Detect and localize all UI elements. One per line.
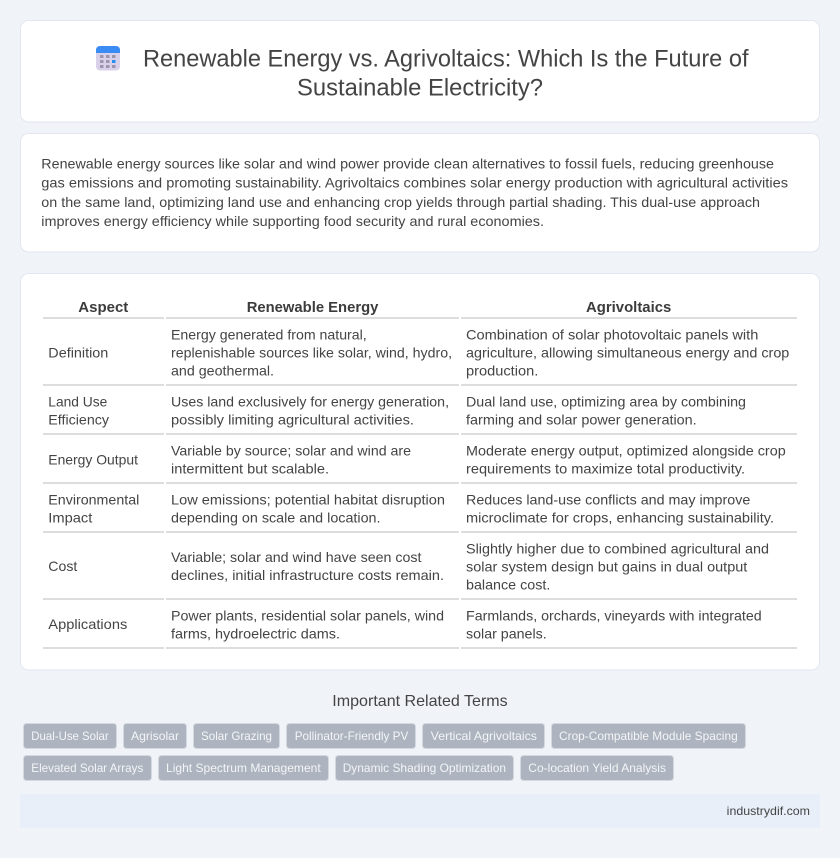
text block: introduction paragraph: on the same land, optimizing land use and enhancing crop yields through partial shading. This dual-use approach bbox=[41, 194, 760, 210]
table row: Land Use Efficiency: farming and solar power generation. bbox=[466, 412, 697, 428]
table header: Renewable Energy bbox=[247, 299, 379, 316]
table row: Definition: Combination of solar photovoltaic panels with bbox=[466, 326, 758, 342]
table row: Cost: solar system design but gains in dual output bbox=[466, 558, 747, 574]
tag: Dynamic Shading Optimization: Dynamic Shading Optimization bbox=[343, 761, 506, 775]
icon: calendar bbox=[96, 46, 120, 70]
table row: Cost: Cost bbox=[48, 558, 77, 574]
title: Renewable Energy vs. Agrivoltaics: Which Is the Future of bbox=[143, 46, 749, 73]
table row: Applications: solar panels. bbox=[466, 625, 547, 641]
text block: introduction paragraph: improves energy efficiency while supporting food security and rural economies. bbox=[41, 213, 544, 229]
tag: Dynamic Shading Optimization bbox=[336, 756, 514, 780]
text block: introduction paragraph: gas emissions and promoting sustainability. Agrivoltaics combines solar energy production with agricultural activities bbox=[41, 175, 788, 191]
table row: Environmental Impact bbox=[43, 491, 797, 533]
table row: Energy Output: Variable by source; solar and wind are bbox=[171, 442, 411, 458]
table header: Aspect bbox=[78, 299, 128, 316]
table row: Land Use Efficiency: Uses land exclusively for energy generation, bbox=[171, 394, 449, 410]
tag: Vertical Agrivoltaics bbox=[422, 724, 544, 748]
table row: Cost: declines, initial infrastructure costs remain. bbox=[171, 567, 444, 583]
footer bbox=[20, 794, 820, 828]
table row: Environmental Impact: Reduces land-use conflicts and may improve bbox=[466, 491, 751, 507]
tag list: related terms bbox=[24, 724, 746, 780]
tag: Light Spectrum Management bbox=[158, 756, 328, 780]
table row: Definition: and geothermal. bbox=[171, 362, 274, 378]
table row: Cost: balance cost. bbox=[466, 576, 550, 592]
footer: industrydif.com bbox=[727, 804, 810, 818]
tag: Agrisolar bbox=[124, 724, 186, 748]
tag: Agrisolar: Agrisolar bbox=[131, 729, 179, 743]
table row: Land Use Efficiency: Land Use bbox=[48, 394, 108, 410]
table row: Land Use Efficiency bbox=[43, 394, 797, 435]
text block: introduction paragraph bbox=[41, 155, 788, 229]
tag: Dual-Use Solar: Dual-Use Solar bbox=[31, 729, 109, 743]
panel: comparison table bbox=[20, 274, 820, 670]
tag: Dual-Use Solar bbox=[24, 724, 116, 748]
table row: Applications: Applications bbox=[48, 616, 127, 632]
table row: Energy Output: Energy Output bbox=[48, 451, 138, 467]
tag: Crop-Compatible Module Spacing: Crop-Compatible Module Spacing bbox=[559, 729, 738, 743]
tag: Pollinator-Friendly PV bbox=[286, 724, 416, 748]
table row: Energy Output: intermittent but scalable. bbox=[171, 460, 329, 476]
table row: Cost: Slightly higher due to combined agricultural and bbox=[466, 540, 769, 556]
table row: Applications bbox=[43, 607, 797, 649]
table row: Definition bbox=[43, 326, 797, 386]
table row: Definition: Energy generated from natural, bbox=[171, 326, 367, 342]
table row: Definition: replenishable sources like solar, wind, hydro, bbox=[171, 344, 452, 360]
table row: Environmental Impact: Environmental bbox=[48, 491, 139, 507]
heading: important related terms: Important Related Terms bbox=[332, 693, 508, 710]
table row: Definition: agriculture, allowing simultaneous energy and crop bbox=[466, 344, 790, 360]
table row: Environmental Impact: Impact bbox=[48, 509, 92, 525]
tag: Solar Grazing bbox=[194, 724, 280, 748]
table row: Environmental Impact: microclimate for crops, enhancing sustainability. bbox=[466, 509, 774, 525]
table row: Applications: farms, hydroelectric dams. bbox=[171, 625, 340, 641]
tag: Pollinator-Friendly PV: Pollinator-Friendly PV bbox=[295, 729, 408, 743]
table header bbox=[43, 299, 797, 319]
table header: Agrivoltaics bbox=[586, 299, 671, 316]
tag: Elevated Solar Arrays bbox=[24, 756, 152, 780]
table row: Definition: Definition bbox=[48, 344, 108, 360]
tag: Elevated Solar Arrays: Elevated Solar Arrays bbox=[31, 761, 143, 775]
table row: Environmental Impact: depending on scale and location. bbox=[171, 509, 380, 525]
tag: Co-location Yield Analysis: Co-location Yield Analysis bbox=[528, 761, 666, 775]
table row: Land Use Efficiency: Efficiency bbox=[48, 412, 109, 428]
panel: introduction bbox=[20, 134, 820, 252]
title bbox=[143, 46, 749, 102]
table row: Land Use Efficiency: Dual land use, optimizing area by combining bbox=[466, 394, 746, 410]
tag: Vertical Agrivoltaics: Vertical Agrivoltaics bbox=[431, 729, 537, 743]
table row: Energy Output bbox=[43, 442, 797, 484]
table row: Cost bbox=[43, 540, 797, 600]
title: Sustainable Electricity? bbox=[297, 75, 543, 102]
text block: introduction paragraph: Renewable energy sources like solar and wind power provide clean alternatives to fossil fuels, reducing greenhouse bbox=[41, 155, 774, 171]
table row: Cost: Variable; solar and wind have seen cost bbox=[171, 549, 422, 565]
tag: Light Spectrum Management: Light Spectrum Management bbox=[166, 761, 321, 775]
table row: Environmental Impact: Low emissions; potential habitat disruption bbox=[171, 491, 445, 507]
panel: title card bbox=[20, 20, 820, 122]
table row: Applications: Power plants, residential solar panels, wind bbox=[171, 607, 444, 623]
table row: Definition: production. bbox=[466, 362, 538, 378]
tag: Crop-Compatible Module Spacing bbox=[552, 724, 746, 748]
tag: Solar Grazing: Solar Grazing bbox=[201, 729, 272, 743]
table row: Land Use Efficiency: possibly limiting agricultural activities. bbox=[171, 412, 414, 428]
table row: Energy Output: requirements to maximize total productivity. bbox=[466, 460, 745, 476]
table row: Energy Output: Moderate energy output, optimized alongside crop bbox=[466, 442, 786, 458]
table row: Applications: Farmlands, orchards, vineyards with integrated bbox=[466, 607, 762, 623]
tag: Co-location Yield Analysis bbox=[520, 756, 674, 780]
